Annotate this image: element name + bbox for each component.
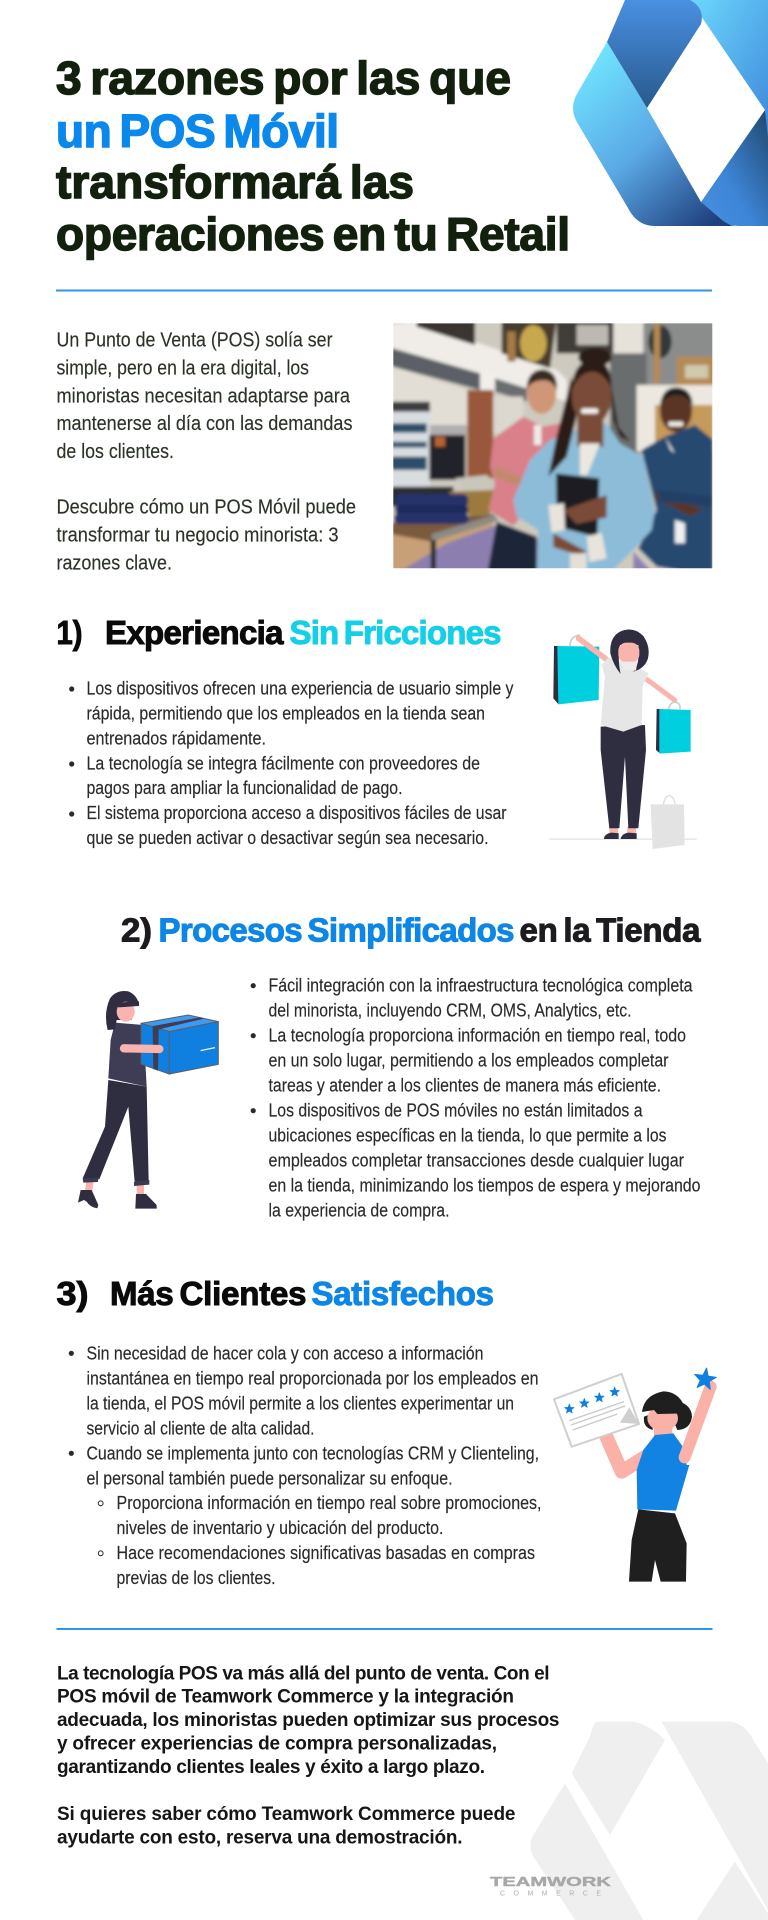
closing text: adecuada, los minoristas pueden optimizar sus procesos <box>57 1710 560 1731</box>
photo: store staff <box>387 317 720 577</box>
section 1 bullets <box>69 678 513 848</box>
section 2 bullets: empleados completar transacciones desde cualquier lugar <box>268 1151 684 1171</box>
section 2 bullets: La tecnología proporciona información en tiempo real, todo <box>268 1026 686 1046</box>
section 2 bullets: la experiencia de compra. <box>268 1201 450 1221</box>
illustration: woman with shopping bags <box>549 629 697 849</box>
intro text: transformar tu negocio minorista: 3 <box>56 523 338 546</box>
closing text: y ofrecer experiencias de compra personalizadas, <box>57 1733 497 1754</box>
title: operaciones en tu Retail <box>56 208 570 260</box>
footer logo text: TEAMWORK <box>490 1874 612 1889</box>
intro text <box>56 329 356 574</box>
section 1 bullets: que se pueden activar o desactivar según sea necesario. <box>86 828 488 848</box>
intro text: razones clave. <box>56 551 172 574</box>
title: un POS Móvil <box>56 105 339 157</box>
illustration: woman carrying box <box>78 991 218 1209</box>
section 2 bullets: del minorista, incluyendo CRM, OMS, Analytics, etc. <box>268 1001 632 1021</box>
section 3 bullets: la tienda, el POS móvil permite a los clientes experimentar un <box>86 1393 514 1413</box>
section 1 bullets: entrenados rápidamente. <box>86 728 266 748</box>
section 1 bullets: rápida, permitiendo que los empleados en la tienda sean <box>86 703 485 723</box>
section 1 heading: 1) <box>56 614 82 651</box>
intro text: simple, pero en la era digital, los <box>56 356 309 379</box>
closing text: La tecnología POS va más allá del punto de venta. Con el <box>57 1663 550 1684</box>
section 1 heading <box>56 614 502 651</box>
section 3 bullets: niveles de inventario y ubicación del producto. <box>116 1518 444 1538</box>
section 3 bullets: Sin necesidad de hacer cola y con acceso a información <box>86 1343 484 1363</box>
title <box>56 52 570 260</box>
section 2 heading: en la Tienda <box>520 912 701 949</box>
section 2 bullets: ubicaciones específicas en la tienda, lo que permite a los <box>268 1126 666 1146</box>
section 1 bullets: La tecnología se integra fácilmente con proveedores de <box>86 753 480 773</box>
closing text <box>57 1663 560 1848</box>
closing text: POS móvil de Teamwork Commerce y la integración <box>57 1686 514 1707</box>
section 3 bullets: el personal también puede personalizar su enfoque. <box>86 1468 452 1488</box>
closing text: Si quieres saber cómo Teamwork Commerce puede <box>57 1804 516 1825</box>
section 2 bullets: Fácil integración con la infraestructura tecnológica completa <box>268 976 693 996</box>
section 2 bullets: en la tienda, minimizando los tiempos de espera y mejorando <box>268 1176 700 1196</box>
section 3 bullets: servicio al cliente de alta calidad. <box>86 1418 314 1438</box>
section 3 bullets: previas de los clientes. <box>116 1568 276 1588</box>
section 2 bullets: tareas y atender a los clientes de manera más eficiente. <box>268 1076 661 1096</box>
section 3 bullets: Proporciona información en tiempo real sobre promociones, <box>116 1493 542 1513</box>
title: 3 razones por las que <box>56 52 511 104</box>
watermark logo <box>530 1722 768 1920</box>
section 1 bullets: pagos para ampliar la funcionalidad de pago. <box>86 778 402 798</box>
logo ribbon top right <box>573 0 768 226</box>
section 3 heading: Más Clientes <box>110 1275 306 1312</box>
section 1 bullets: El sistema proporciona acceso a dispositivos fáciles de usar <box>86 803 507 823</box>
illustration: woman with review card and star <box>554 1367 717 1582</box>
section 3 bullets: instantánea en tiempo real proporcionada por los empleados en <box>86 1368 538 1388</box>
section 3 heading: Satisfechos <box>312 1275 494 1312</box>
section 2 heading: 2) <box>121 912 152 949</box>
intro text: de los clientes. <box>56 440 174 463</box>
closing text: ayudarte con esto, reserva una demostración. <box>57 1827 462 1848</box>
footer logo text: COMMERCE <box>500 1890 601 1898</box>
section 1 heading: Experiencia <box>105 614 284 651</box>
closing text: garantizando clientes leales y éxito a largo plazo. <box>57 1757 485 1778</box>
section 3 bullets: Hace recomendaciones significativas basadas en compras <box>116 1543 535 1563</box>
section 2 bullets <box>251 976 701 1221</box>
footer logo text <box>490 1874 612 1898</box>
section 3 heading <box>56 1275 494 1312</box>
section 2 heading: Procesos Simplificados <box>158 912 514 949</box>
intro text: minoristas necesitan adaptarse para <box>56 384 351 407</box>
section 1 bullets: Los dispositivos ofrecen una experiencia de usuario simple y <box>86 678 514 698</box>
section 2 heading <box>121 912 701 949</box>
section 2 bullets: Los dispositivos de POS móviles no están limitados a <box>268 1101 643 1121</box>
title: transformará las <box>56 156 414 208</box>
section 1 heading: Sin Fricciones <box>290 614 502 651</box>
intro text: Descubre cómo un POS Móvil puede <box>56 496 356 519</box>
section 3 bullets: Cuando se implementa junto con tecnologías CRM y Clienteling, <box>86 1443 539 1463</box>
section 3 bullets <box>69 1343 541 1588</box>
section 3 heading: 3) <box>56 1275 88 1312</box>
intro text: mantenerse al día con las demandas <box>56 412 352 435</box>
section 2 bullets: en un solo lugar, permitiendo a los empleados completar <box>268 1051 669 1071</box>
intro text: Un Punto de Venta (POS) solía ser <box>56 329 333 352</box>
